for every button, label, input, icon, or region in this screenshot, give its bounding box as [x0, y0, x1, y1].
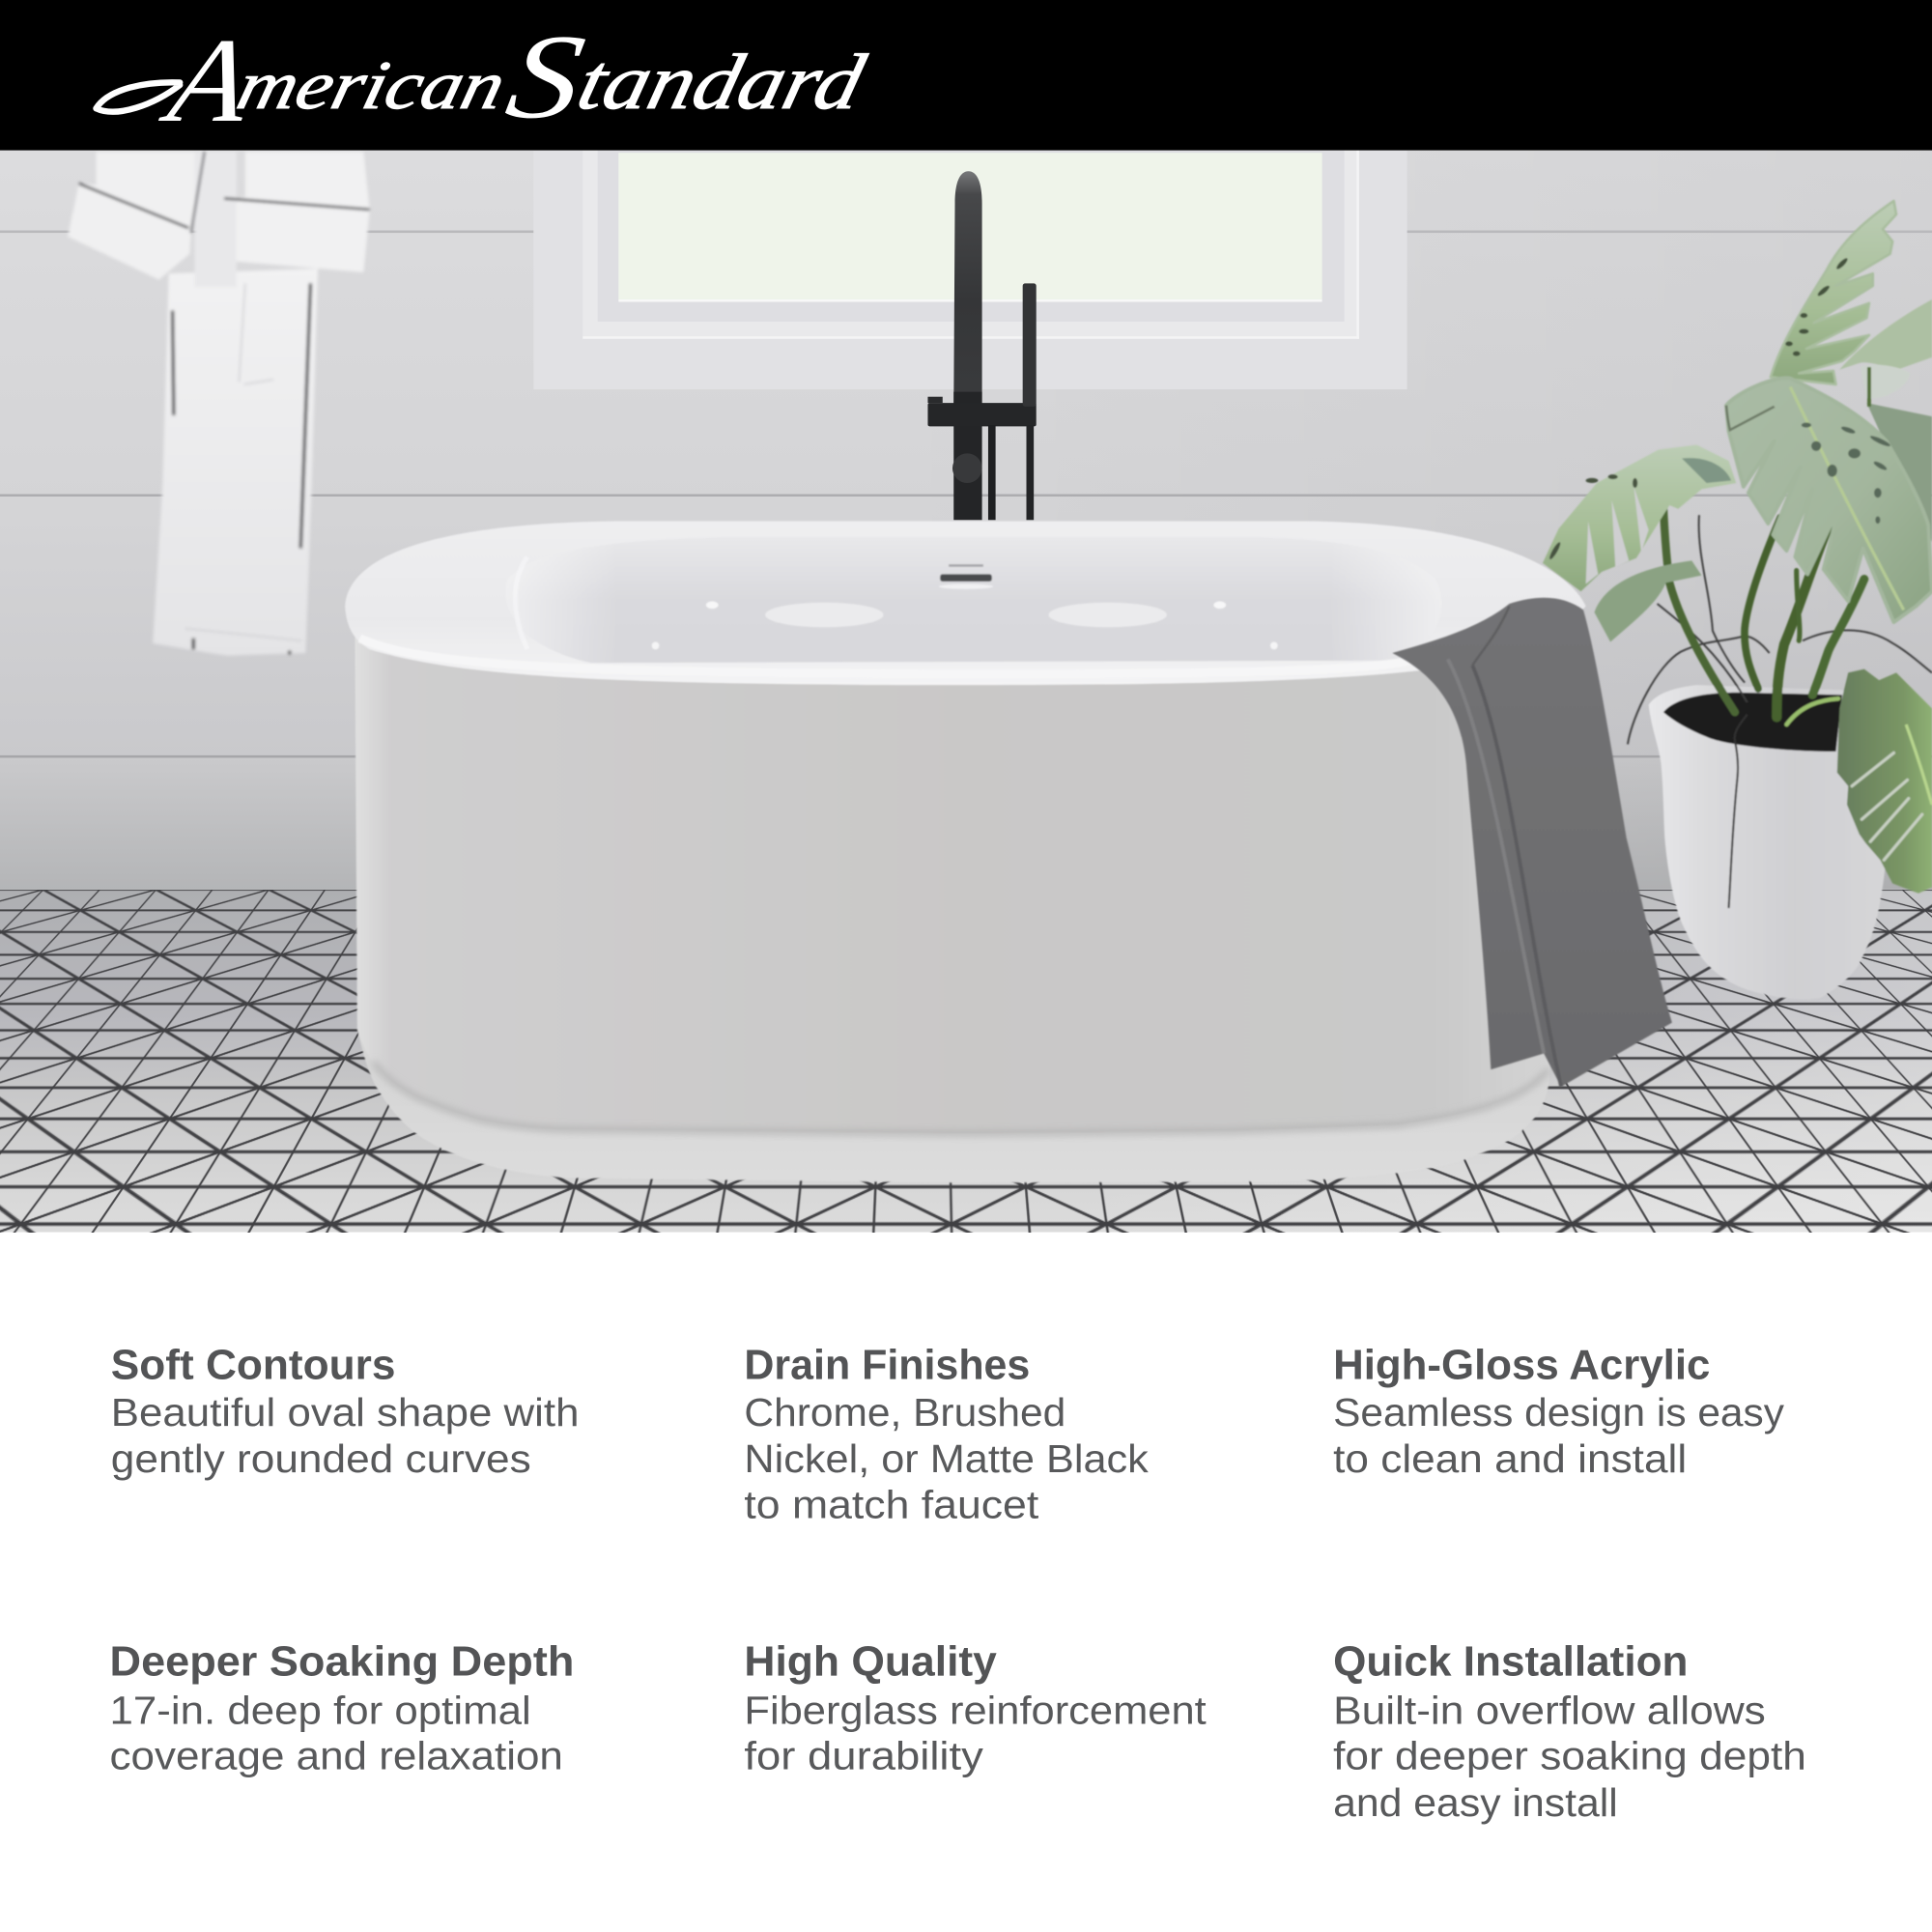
feature: High-Gloss Acrylic — [1333, 1342, 1785, 1481]
bathrobe — [68, 152, 370, 656]
tub outer body — [355, 635, 1555, 1133]
feature: Drain Finishes: to match faucet — [744, 1482, 1039, 1526]
logo: American Standard: A — [154, 14, 262, 148]
feature: Soft Contours: Beautiful oval shape with — [111, 1390, 579, 1435]
bottom highlights — [652, 601, 1278, 649]
feature: Deeper Soaking Depth: 17-in. deep for optimal — [110, 1688, 531, 1732]
bathtub — [345, 522, 1586, 1182]
logo: American Standard: merican — [230, 46, 513, 124]
overflow drain — [940, 574, 992, 582]
front lip highlight — [359, 639, 1417, 674]
leaf: behind right — [1866, 403, 1932, 542]
feature: Quick Installation — [1333, 1639, 1806, 1825]
feature: Deeper Soaking Depth: coverage and relaxation — [110, 1734, 563, 1778]
feature: High Quality — [744, 1639, 1207, 1778]
foot shadow line — [373, 1062, 1548, 1133]
window with trim — [533, 151, 1407, 389]
tub inner basin — [505, 537, 1441, 663]
feature: High-Gloss Acrylic: Seamless design is easy — [1333, 1390, 1785, 1435]
feature: Soft Contours — [111, 1342, 579, 1481]
feature: Deeper Soaking Depth: Deeper Soaking Depth — [110, 1639, 574, 1686]
leaf: upper right — [1839, 299, 1932, 407]
tub rim — [345, 522, 1586, 685]
feature: Deeper Soaking Depth — [110, 1639, 574, 1778]
feature: Soft Contours: Soft Contours — [111, 1342, 395, 1388]
feature: Soft Contours: gently rounded curves — [111, 1436, 531, 1481]
feature: High-Gloss Acrylic: to clean and install — [1333, 1436, 1687, 1481]
potted plant — [1543, 201, 1932, 999]
leaf: top — [1771, 201, 1896, 384]
tub foot band — [355, 635, 1555, 1182]
feature: Quick Installation: Built-in overflow allows — [1333, 1688, 1766, 1732]
feature: Drain Finishes — [744, 1342, 1149, 1526]
leaf: large centre — [1726, 378, 1932, 622]
feature: Drain Finishes: Chrome, Brushed — [744, 1390, 1065, 1435]
feature: Quick Installation: and easy install — [1333, 1780, 1618, 1825]
thin aerial roots — [1628, 515, 1932, 744]
stems — [1662, 474, 1864, 724]
leaf: left — [1543, 444, 1736, 591]
logo: American Standard: tandard — [570, 38, 873, 126]
soil — [1663, 693, 1842, 752]
feature: High Quality: for durability — [744, 1734, 984, 1778]
faucet — [927, 171, 1037, 520]
logo: American Standard: S — [498, 11, 593, 144]
feature: High Quality: Fiberglass reinforcement — [744, 1688, 1207, 1732]
grey towel — [1392, 598, 1672, 1087]
feature: Drain Finishes: Nickel, or Matte Black — [744, 1436, 1149, 1481]
robe body — [153, 269, 318, 656]
tiled floor — [0, 890, 1932, 1233]
logo: American Standard — [96, 11, 873, 148]
feature: Quick Installation: Quick Installation — [1333, 1639, 1688, 1686]
left sleeve and cuff — [68, 152, 205, 280]
plant pot — [1649, 685, 1891, 999]
hanging root — [1729, 715, 1747, 908]
header black band — [0, 0, 1932, 151]
leaf: small — [1595, 560, 1701, 642]
feature: Drain Finishes: Drain Finishes — [744, 1342, 1030, 1388]
feature: Quick Installation: for deeper soaking depth — [1333, 1734, 1806, 1778]
feature: High-Gloss Acrylic: High-Gloss Acrylic — [1333, 1342, 1710, 1388]
right sleeve and cuff — [218, 152, 370, 272]
leaf: lower right — [1837, 669, 1932, 894]
rim highlight — [515, 557, 527, 649]
feature: High Quality: High Quality — [744, 1639, 997, 1686]
